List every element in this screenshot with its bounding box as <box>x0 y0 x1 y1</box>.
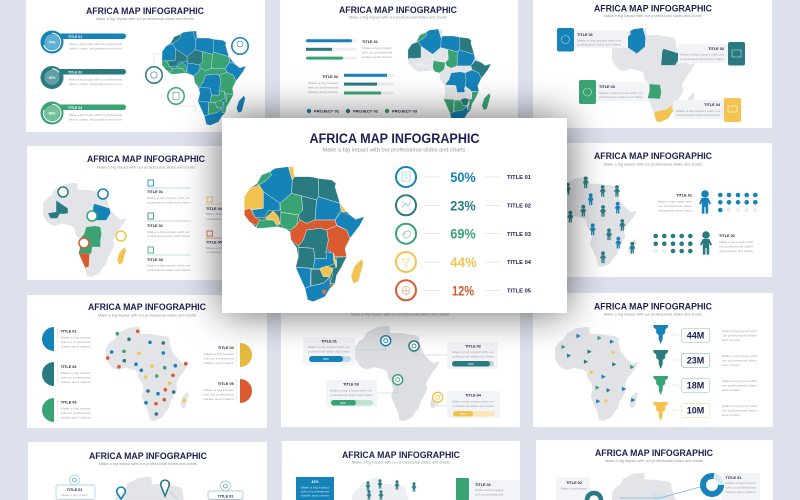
callout 01 <box>557 28 628 52</box>
stat 18M: and charts <box>722 388 741 392</box>
heading: AFRICA MAP INFOGRAPHIC <box>88 301 206 312</box>
callout 01 <box>303 337 355 365</box>
list item 03: TITLE 03 <box>147 258 163 262</box>
row: 23% <box>396 195 531 215</box>
callout 01: slides and charts <box>726 490 756 494</box>
item 05: slides and charts <box>204 397 234 401</box>
blue stat box: slides and charts <box>301 494 330 498</box>
box 01: TITLE 01 <box>67 488 82 492</box>
item 02: Make a big impact <box>61 371 91 375</box>
stat 44M: Make a big impact with <box>722 329 757 333</box>
callout 04: TITLE 04 <box>465 394 482 398</box>
stat 44M: 44M <box>687 330 704 340</box>
callout 01: Make a big impact with our <box>308 345 350 349</box>
grey Africa map <box>554 177 637 267</box>
panel: slide lower left with dots map <box>27 295 267 428</box>
list item 04: professional slides and charts <box>206 217 250 221</box>
blue stat box: Make a big impact <box>301 486 329 490</box>
callout 02: professional slides and charts <box>452 354 495 358</box>
callout 04: Make a big impact with our <box>452 400 494 404</box>
stat 23M: 23M <box>687 356 704 366</box>
subtitle: Make a big impact with our professional slides and charts <box>98 312 196 318</box>
callout 02: Make a big impact with our <box>452 350 494 354</box>
callout 02: Make a big impact with our <box>680 52 724 56</box>
callout 03 <box>579 80 648 104</box>
green callout: Make a big impact <box>475 488 503 492</box>
connector lines <box>355 346 447 406</box>
box 02: TITLE 02 <box>218 494 233 498</box>
row: 23%: TITLE 02 <box>507 204 531 210</box>
grey Africa map, top portion <box>352 478 409 500</box>
item 01: with our professional <box>61 340 91 344</box>
subtitle: Make a big impact with our professional slides and charts <box>351 312 449 316</box>
stat 10M: and charts <box>722 413 741 417</box>
callout 03: professional slides and charts <box>599 95 644 99</box>
callout 01: with our professional <box>726 486 756 490</box>
panel: slide top left with progress rings <box>26 0 265 132</box>
item 01 <box>42 327 91 351</box>
callout 02: TITLE 02 <box>708 47 724 51</box>
row: 69% <box>396 224 531 244</box>
row: 12% <box>396 280 531 300</box>
legend: PROJECT 01 <box>314 110 339 114</box>
map pins <box>58 187 126 248</box>
subtitle: Make a big impact with our professional slides and charts <box>352 460 450 464</box>
grey Africa map <box>555 327 639 421</box>
highlighted country <box>652 490 668 500</box>
panel: slide bottom centre <box>282 441 520 500</box>
panel: slide bottom left <box>28 442 267 500</box>
list item 04 <box>206 197 250 221</box>
grey Africa map, top portion <box>612 473 677 500</box>
text: title 01 <box>658 194 693 212</box>
location pins <box>117 480 178 500</box>
heading: AFRICA MAP INFOGRAPHIC <box>86 5 204 16</box>
icon: orange circle <box>396 280 416 300</box>
list item 05 <box>206 231 250 254</box>
item 02: TITLE 02 <box>61 365 77 369</box>
heading: AFRICA MAP INFOGRAPHIC <box>89 450 207 461</box>
item 03: TITLE 03 <box>61 400 77 404</box>
item 01: Make a big impact with our professional <box>69 42 122 46</box>
row: 44%: 44% <box>450 255 477 270</box>
item 01: 70% <box>49 40 55 44</box>
callout 04: TITLE 04 <box>704 103 721 107</box>
heading: AFRICA MAP INFOGRAPHIC <box>339 4 457 15</box>
stat 23M: Make a big impact with <box>722 354 757 358</box>
callout 03: TITLE 03 <box>343 382 359 386</box>
heading: AFRICA MAP INFOGRAPHIC <box>342 449 460 460</box>
blue stat box: with our professional <box>301 490 329 494</box>
panel: slide middle left with map pins <box>27 146 265 280</box>
dot grid 02 <box>653 234 693 253</box>
list item 03: Make a big impact with our <box>147 264 190 268</box>
box 02 <box>208 481 243 500</box>
row: 69%: TITLE 03 <box>507 232 531 238</box>
connector lines <box>154 37 240 112</box>
subtitle: Make a big impact with our professional slides and charts <box>604 162 702 166</box>
callout 01: TITLE 01 <box>726 476 741 480</box>
item 03 <box>42 398 91 422</box>
item 03: slides, charts, infographics and more <box>69 118 122 122</box>
green callout <box>456 478 520 500</box>
callout 02: 90% <box>468 362 474 366</box>
item 03 <box>40 102 126 124</box>
text: title 02: TITLE 02 <box>719 234 735 238</box>
green callout: TITLE 01 <box>475 483 491 487</box>
text 1: slides and charts <box>362 55 393 59</box>
item 03: TITLE 03 <box>68 106 82 110</box>
Africa map, partly coloured <box>408 29 491 123</box>
item 01: Make a big impact <box>61 336 91 340</box>
item 01: slides and charts <box>61 344 91 348</box>
callout 01: Make a big impact <box>726 481 756 485</box>
item 04: TITLE 04 <box>218 346 235 350</box>
item 02: 20% <box>49 76 55 80</box>
callout 03: Make a big impact with our <box>599 91 643 95</box>
legend: PROJECT 02 <box>353 110 378 114</box>
item 02: slides and charts <box>61 380 91 384</box>
item 04 <box>204 343 252 367</box>
item 03: Make a big impact with our professional <box>69 113 122 117</box>
blue stat box: 42% <box>311 480 319 484</box>
text: title 01: TITLE 01 <box>676 194 692 198</box>
item 02: slides, charts, infographics and more <box>69 82 122 86</box>
item 02: with our professional <box>61 376 91 380</box>
stat 44M <box>653 325 758 344</box>
callout 03: 60% <box>340 401 346 405</box>
item 02: TITLE 02 <box>68 70 82 74</box>
panel: main centre slide <box>222 118 567 313</box>
item 05: with our professional <box>204 392 234 396</box>
callout 04: professional slides and charts <box>452 404 495 408</box>
box 01: Make a big impact <box>62 493 88 497</box>
stat 10M <box>653 402 758 421</box>
location dots <box>106 330 188 416</box>
grey Africa map, top portion <box>115 477 184 500</box>
subtitle: Make a big impact with our professional slides and charts <box>604 312 702 316</box>
item 03: 60% <box>49 111 55 115</box>
text 2: slides and charts <box>308 90 339 94</box>
text 2: TITLE 02 <box>322 75 338 79</box>
callout 01 <box>703 473 760 500</box>
connector arrow <box>620 487 700 498</box>
list item 05: Make a big impact with our <box>206 246 249 250</box>
grey Africa map <box>355 326 440 421</box>
subtitle: Make a big impact with our professional slides and charts <box>604 13 702 18</box>
stat 23M: and charts <box>722 363 741 367</box>
text 2: Make a big impact <box>308 81 338 85</box>
Africa map with highlighted countries <box>612 28 696 122</box>
item 04: slides and charts <box>204 361 234 365</box>
callout 02: Make a big impact <box>561 486 587 490</box>
legend <box>307 109 417 114</box>
callout 04 <box>673 98 741 122</box>
text 1: with our professional <box>362 50 392 54</box>
callout 03 <box>326 380 377 407</box>
grey Africa map <box>106 327 190 421</box>
text: title 01: Make a big impact with <box>658 200 692 204</box>
row: 23%: 23% <box>450 198 476 213</box>
item 05: Make a big impact <box>204 388 234 392</box>
callout 03: professional slides and charts <box>330 393 373 397</box>
item 02 <box>42 362 91 386</box>
callout 01: professional slides and charts <box>577 42 622 46</box>
item 05: TITLE 05 <box>218 382 234 386</box>
text 2: with our professional <box>308 86 338 90</box>
list item 04: TITLE 04 <box>206 207 223 211</box>
list item 02: professional slides and charts <box>147 234 191 238</box>
list item 01: Make a big impact with our <box>147 196 190 200</box>
item 04: with our professional <box>204 356 234 360</box>
row: 50%: TITLE 01 <box>507 175 531 181</box>
row: 50% <box>396 167 531 187</box>
panel: slide top right with country callouts <box>533 0 772 128</box>
text 1: Make a big impact <box>362 46 392 50</box>
callout 04: 50% <box>460 412 466 416</box>
item 03: slides and charts <box>61 416 91 420</box>
text 1: TITLE 01 <box>362 40 378 44</box>
item 03: Make a big impact <box>61 406 91 410</box>
green callout: with our professional <box>475 492 503 496</box>
stat 18M: 18M <box>687 381 704 391</box>
callout 04 <box>447 391 500 418</box>
callout 02 <box>447 342 498 369</box>
people markers on map <box>565 176 635 263</box>
panel: slide bottom right <box>536 440 773 500</box>
text: title 02: our professional slides <box>719 244 754 248</box>
item 02: Make a big impact with our professional <box>69 78 122 82</box>
people markers <box>366 479 416 500</box>
blue stat box <box>296 477 334 500</box>
item 05 <box>204 379 252 403</box>
item 01 <box>40 30 126 54</box>
subtitle: Make a big impact with our professional slides and charts <box>322 147 466 153</box>
icon: blue circle <box>396 167 416 187</box>
legend: PROJECT 03 <box>392 110 417 114</box>
stat 18M: Make a big impact with <box>722 379 757 383</box>
list item 02 <box>147 213 191 238</box>
Africa map with highlighted countries <box>43 183 127 277</box>
row: 12%: TITLE 05 <box>507 288 531 294</box>
heading: AFRICA MAP INFOGRAPHIC <box>310 131 480 146</box>
location pins <box>381 336 443 402</box>
row: 12%: 12% <box>452 283 474 298</box>
subtitle: Make a big impact with our professional slides and charts <box>605 458 703 463</box>
bar chart 1 <box>306 39 357 60</box>
stat 18M <box>653 376 758 395</box>
text: title 02 <box>719 234 754 253</box>
item 01: TITLE 01 <box>68 35 82 39</box>
text 2 <box>308 75 339 94</box>
heading: AFRICA MAP INFOGRAPHIC <box>594 2 712 14</box>
subtitle: Make a big impact with our professional slides and charts <box>97 164 195 170</box>
callout 02: TITLE 02 <box>566 481 582 485</box>
icon: large person blue <box>699 190 711 214</box>
subtitle: Make a big impact with our professional slides and charts <box>99 461 197 466</box>
item 01: TITLE 01 <box>61 330 77 334</box>
Africa map, multicolour <box>162 31 246 125</box>
row: 50%: 50% <box>450 170 476 185</box>
callout 01: TITLE 01 <box>321 340 337 344</box>
panel: slide lower centre with progress callouts <box>281 295 520 427</box>
text: title 01: infographics and charts <box>658 208 693 212</box>
row: 44% <box>396 252 532 272</box>
panel: slide lower right with pin statistics <box>533 293 773 427</box>
callout 01: TITLE 01 <box>577 33 593 37</box>
callout 04: Make a big impact with our <box>676 109 720 113</box>
callout 03: TITLE 03 <box>599 85 615 89</box>
item 03: with our professional <box>61 411 91 415</box>
callout 02: professional slides and charts <box>680 57 725 61</box>
icon circles <box>146 38 248 104</box>
list item 01: TITLE 01 <box>147 190 163 194</box>
heading: AFRICA MAP INFOGRAPHIC <box>87 153 205 164</box>
box 01 <box>56 475 95 500</box>
panel: slide top centre with projects <box>280 0 518 128</box>
stat 10M: 10M <box>687 406 704 416</box>
list item 04: Make a big impact with our <box>206 212 249 216</box>
stat 44M: and charts <box>722 338 741 342</box>
flag markers <box>562 334 635 403</box>
panel: slide middle right with people <box>533 143 772 277</box>
item 04: Make a big impact <box>204 352 234 356</box>
stat 18M: our professional slides <box>722 384 758 388</box>
stat 23M: our professional slides <box>722 358 758 362</box>
icon: green circle <box>396 224 416 244</box>
subtitle: Make a big impact with our professional slides and charts <box>96 16 194 21</box>
list item 02: TITLE 02 <box>147 224 163 228</box>
heading: AFRICA MAP INFOGRAPHIC <box>594 150 712 161</box>
list item 03 <box>147 247 191 272</box>
bar chart 2 <box>344 74 394 94</box>
callout 02 <box>678 42 745 66</box>
row: 69%: 69% <box>450 227 476 242</box>
item 01: slides, charts, infographics and more <box>69 47 122 51</box>
list item 05: professional slides and charts <box>206 250 250 254</box>
callout 02: TITLE 02 <box>465 344 481 348</box>
icon: large person teal <box>700 231 712 255</box>
icon: teal circle <box>396 195 416 215</box>
callout 02 <box>556 477 603 500</box>
callout 01: Make a big impact with our <box>577 38 621 42</box>
text: title 01: our professional slides <box>658 204 693 208</box>
row: 44%: TITLE 04 <box>507 260 532 266</box>
heading: AFRICA MAP INFOGRAPHIC <box>594 300 712 312</box>
callout 03: Make a big impact with our <box>330 388 372 392</box>
stat 10M: our professional slides <box>722 408 758 412</box>
text 1 <box>362 40 393 59</box>
text: title 02: Make a big impact with <box>719 240 753 244</box>
callout 01: professional slides and charts <box>308 350 351 354</box>
stat 23M <box>653 350 758 369</box>
heading: AFRICA MAP INFOGRAPHIC <box>595 447 713 458</box>
list item 03: professional slides and charts <box>147 268 191 272</box>
dot grid 01 <box>718 193 758 212</box>
callout 01: 80% <box>323 357 329 361</box>
callout 04: professional slides and charts <box>676 113 721 117</box>
icon: yellow circle <box>396 252 416 272</box>
list item 02: Make a big impact with our <box>147 230 190 234</box>
subtitle: Make a big impact with our professional slides and charts <box>349 14 447 20</box>
list item 05: TITLE 05 <box>206 240 222 244</box>
list item 01: professional slides and charts <box>147 200 191 204</box>
text: title 02: infographics and charts <box>719 249 754 253</box>
Africa choropleth map <box>244 167 364 302</box>
item 02 <box>40 66 126 89</box>
stat 44M: our professional slides <box>722 334 758 338</box>
stat 10M: Make a big impact with <box>722 404 757 408</box>
list item 01 <box>147 180 191 204</box>
